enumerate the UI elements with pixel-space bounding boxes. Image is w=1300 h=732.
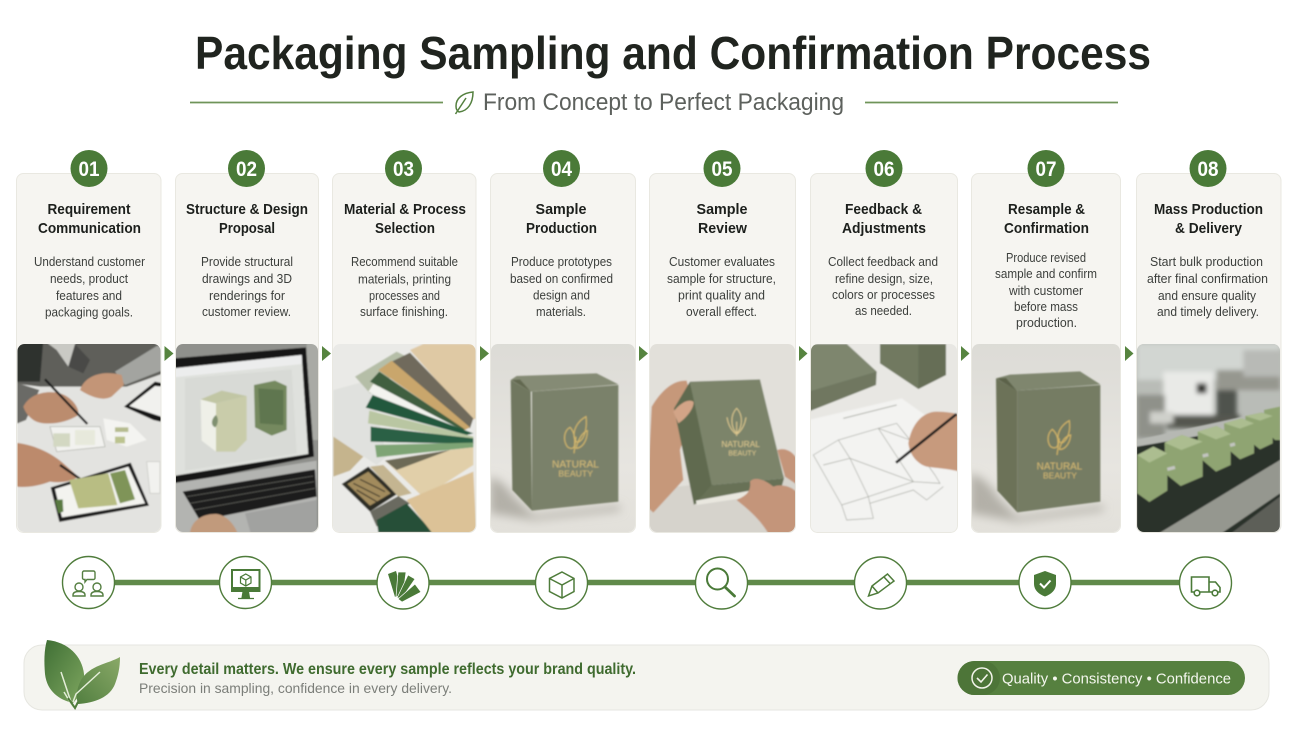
photo: production line: [1133, 340, 1283, 537]
panel: step 01 requirement communication: packaging goals.: [45, 306, 133, 320]
arrow: [639, 346, 648, 361]
timeline connector: [112, 580, 1182, 585]
badge: quality, consistency, confidence: [958, 661, 1245, 695]
panel: step 02 structure and design proposal: Proposal: [219, 220, 275, 237]
panel: step 06 feedback and adjustments: colors or processes: [832, 288, 935, 302]
panel: step 07 resample and confirmation: with customer: [1008, 284, 1083, 298]
panel: step 08 mass production and delivery: Mass Production: [1154, 201, 1263, 218]
panel: step 08 mass production and delivery: after final confirmation: [1147, 272, 1268, 286]
title: Packaging Sampling and Confirmation Process: [195, 27, 1151, 79]
panel: step 04 sample production: 04: [551, 158, 572, 181]
panel: step 06 feedback and adjustments: as needed.: [855, 304, 912, 318]
panel: step 07 resample and confirmation: 07: [1036, 158, 1056, 181]
panel: step 02 structure and design proposal: drawings and 3D: [202, 272, 292, 286]
panel: step 04 sample production: [490, 150, 636, 532]
icon: pencil: [854, 557, 906, 609]
panel: step 06 feedback and adjustments: 06: [874, 158, 894, 181]
photo: revised sample box: NATURAL: [1037, 462, 1083, 473]
panel: step 02 structure and design proposal: customer review.: [202, 305, 291, 319]
panel: step 07 resample and confirmation: Produce revised: [1006, 251, 1086, 265]
icon: magnifying glass: [696, 557, 748, 609]
panel: step 06 feedback and adjustments: Adjustments: [842, 220, 926, 237]
panel: step 04 sample production: Production: [526, 220, 597, 237]
subtitle with leaf and rules: From Concept to Perfect Packaging: [483, 89, 844, 116]
icon: people talking: [62, 556, 114, 608]
panel: step 01 requirement communication: needs, product: [50, 272, 128, 286]
panel: step 03 material and process selection: 03: [393, 158, 414, 181]
panel: step 04 sample production: Sample: [536, 201, 586, 218]
photo: green sample box: NATURAL: [552, 459, 599, 470]
panel: step 08 mass production and delivery: 08: [1198, 158, 1219, 181]
panel: step 05 sample review: overall effect.: [686, 305, 757, 319]
photo: revised sample box: BEAUTY: [1043, 470, 1077, 480]
panel: step 08 mass production and delivery: and timely delivery.: [1157, 305, 1259, 319]
panel: step 02 structure and design proposal: renderings for: [209, 289, 285, 303]
icon: green leaves: [44, 640, 120, 708]
photo: hands holding sample box: NATURAL: [721, 439, 760, 449]
panel: step 05 sample review: [650, 150, 796, 532]
panel: step 07 resample and confirmation: before mass: [1014, 300, 1078, 314]
panel: step 01 requirement communication: features and: [56, 289, 122, 303]
panel: step 07 resample and confirmation: Resample &: [1008, 201, 1085, 218]
arrow: [799, 346, 808, 361]
panel: step 04 sample production: design and: [533, 288, 590, 302]
panel: step 02 structure and design proposal: Provide structural: [201, 255, 293, 269]
panel: step 03 material and process selection: Recommend suitable: [351, 255, 458, 269]
panel: step 08 mass production and delivery: Start bulk production: [1150, 255, 1263, 269]
arrow: [480, 346, 489, 361]
icon: shield check: [1019, 556, 1071, 608]
panel: step 07 resample and confirmation: production.: [1016, 316, 1077, 330]
panel: step 08 mass production and delivery: and ensure quality: [1158, 289, 1257, 303]
panel: step 05 sample review: Review: [698, 220, 747, 237]
panel: step 01 requirement communication: Communication: [38, 220, 141, 237]
panel: step 06 feedback and adjustments: [810, 150, 958, 532]
photo: green sample box: BEAUTY: [558, 468, 593, 478]
panel: step 01 requirement communication: Requirement: [48, 201, 131, 218]
photo: material swatch fan: [330, 340, 477, 537]
banner supporting line: Precision in sampling, confidence in every delivery.: [139, 680, 452, 696]
panel: step 01 requirement communication: Understand customer: [34, 255, 145, 269]
panel: step 07 resample and confirmation: Confirmation: [1004, 220, 1089, 237]
photo: hands holding sample box: [647, 340, 800, 537]
panel: step 05 sample review: Sample: [696, 201, 748, 218]
panel: step 07 resample and confirmation: [972, 150, 1120, 532]
panel: step 06 feedback and adjustments: Collect feedback and: [828, 255, 938, 269]
icon: box: [536, 557, 588, 609]
arrow: [1125, 346, 1134, 361]
arrow: [961, 346, 970, 361]
panel: step 02 structure and design proposal: [176, 150, 318, 532]
photo: hand sketching dieline: [811, 344, 957, 522]
panel: step 04 sample production: materials.: [536, 305, 586, 319]
panel: step 03 material and process selection: processes and: [369, 289, 440, 303]
arrow: [164, 346, 174, 361]
panel: step 06 feedback and adjustments: refine design, size,: [835, 272, 933, 286]
photo: green sample box: [491, 344, 635, 532]
panel: step 03 material and process selection: [332, 150, 476, 532]
panel: step 05 sample review: print quality and: [678, 288, 765, 302]
icon: delivery truck: [1180, 557, 1232, 609]
panel: step 01 requirement communication: [16, 150, 161, 532]
panel: step 05 sample review: Customer evaluates: [669, 255, 775, 269]
panel: step 08 mass production and delivery: & Delivery: [1175, 220, 1243, 237]
panel: step 02 structure and design proposal: 02: [236, 158, 257, 181]
panel: step 03 material and process selection: Material & Process: [344, 201, 466, 218]
panel: step 03 material and process selection: surface finishing.: [360, 305, 448, 319]
subtitle with leaf and rules: [190, 89, 1118, 116]
panel: step 04 sample production: Produce prototypes: [511, 255, 612, 269]
panel: step 03 material and process selection: Selection: [375, 220, 435, 237]
panel: step 03 material and process selection: materials, printing: [358, 272, 451, 286]
icon: colour swatch fan: [377, 557, 429, 609]
panel: step 08 mass production and delivery: [1136, 150, 1281, 532]
panel: bottom banner: [24, 640, 1269, 710]
panel: step 07 resample and confirmation: sample and confirm: [995, 267, 1097, 281]
banner message: Every detail matters. We ensure every sample reflects your brand quality.: [139, 661, 636, 678]
panel: step 05 sample review: sample for structure,: [667, 272, 776, 286]
panel: step 02 structure and design proposal: Structure & Design: [186, 201, 308, 218]
photo: laptop with 3D box rendering: [173, 340, 320, 537]
panel: step 06 feedback and adjustments: Feedback &: [845, 201, 922, 218]
icon: monitor with box: [220, 556, 272, 608]
photo: revised sample box: [972, 344, 1120, 532]
panel: step 05 sample review: 05: [712, 158, 733, 181]
photo: team reviewing designs: [13, 340, 163, 537]
photo: hands holding sample box: BEAUTY: [728, 448, 756, 457]
panel: step 04 sample production: based on confirmed: [510, 272, 613, 286]
panel: step 01 requirement communication: 01: [78, 158, 100, 181]
badge: quality, consistency, confidence: Quality • Consistency • Confidence: [1002, 670, 1231, 688]
arrow: [322, 346, 331, 361]
